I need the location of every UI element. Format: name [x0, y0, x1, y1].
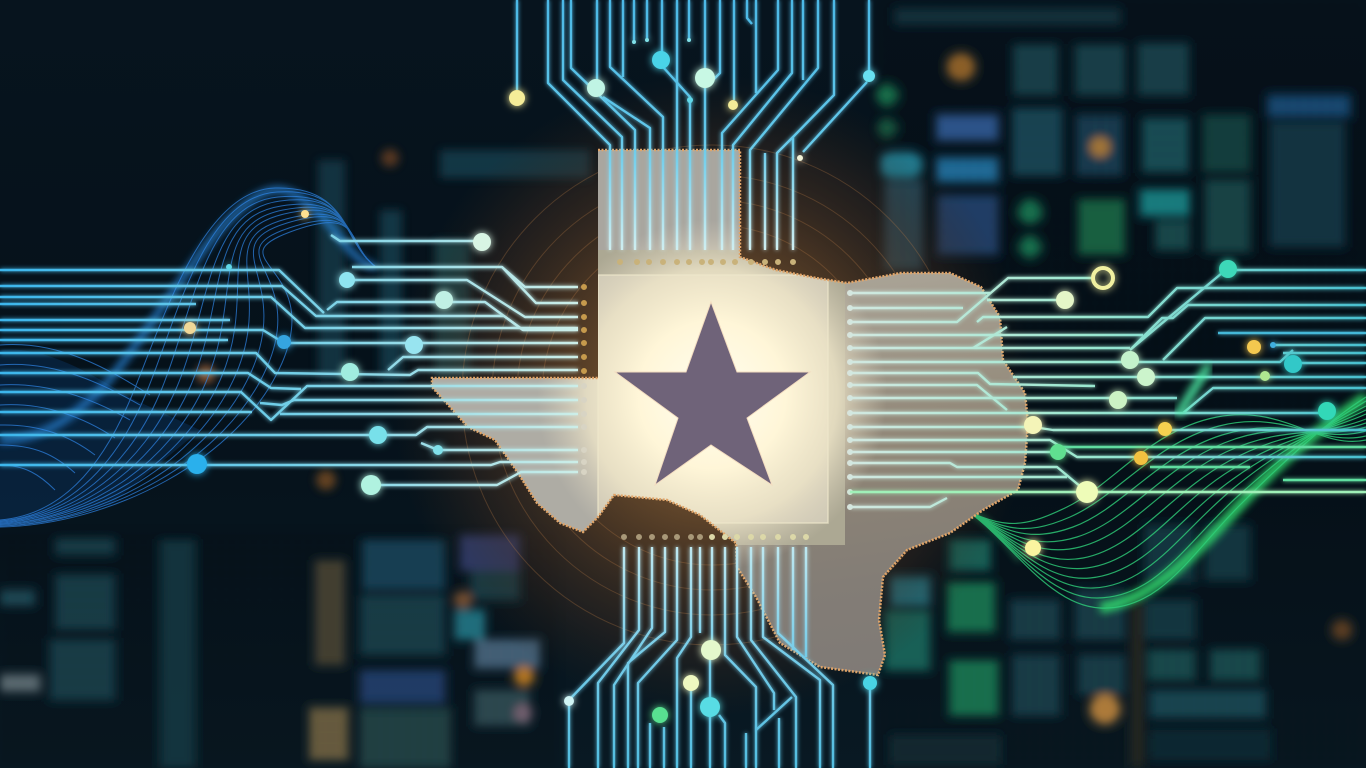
halo rings	[462, 145, 962, 645]
chip body	[598, 250, 845, 545]
panhandle fill	[598, 150, 740, 260]
west arm fill	[430, 378, 600, 538]
core glow	[548, 230, 880, 561]
circuit traces: bottom	[569, 547, 870, 768]
blurred city: right towers	[876, 0, 1366, 768]
circuit traces: right	[850, 268, 1366, 507]
blurred city: left towers	[0, 149, 590, 768]
window grid texture left	[0, 530, 560, 768]
Texas silhouette	[420, 140, 1040, 690]
right green mesh wave	[947, 397, 1366, 608]
chip inner square	[598, 275, 828, 523]
inner square outline	[598, 275, 828, 523]
star	[615, 302, 810, 485]
circuit traces: left	[0, 235, 578, 485]
green light streak	[1180, 368, 1207, 412]
circuit traces: top and panhandle	[517, 0, 869, 250]
chip contact pads	[584, 262, 850, 537]
window grid texture	[880, 0, 1366, 768]
glowing nodes	[184, 38, 1336, 723]
left blue mesh wave	[0, 188, 376, 527]
Texas fringe outline	[432, 150, 1028, 675]
central glow	[392, 75, 1032, 715]
